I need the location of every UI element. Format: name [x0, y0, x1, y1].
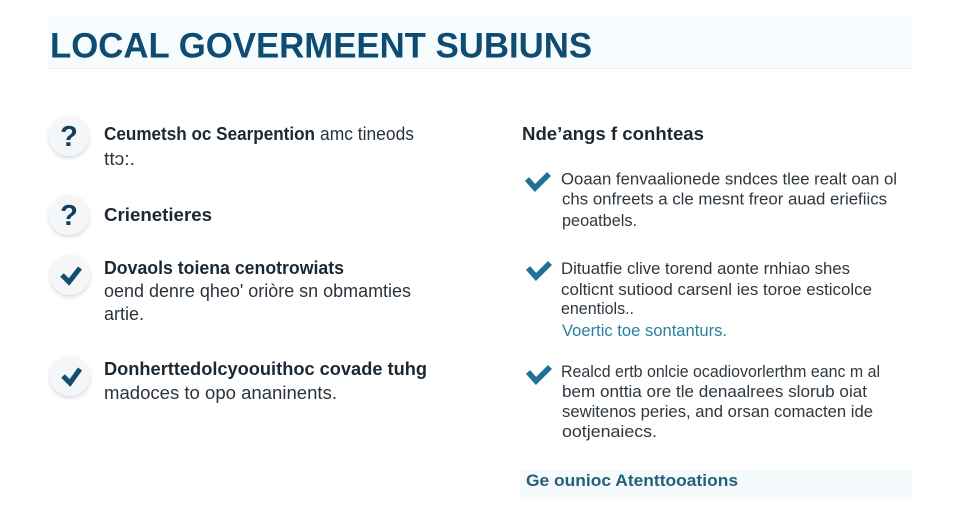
icon: check mark	[528, 367, 550, 381]
check 1 text: Dovaols toiena cenotrowiats	[104, 258, 344, 278]
question 1 text: amc tineods	[320, 124, 414, 144]
benefit 2	[528, 259, 872, 340]
benefit 2 text: Dituatfie clive torend aonte rnhiao shes	[561, 259, 850, 278]
check 2 text	[104, 359, 427, 403]
right column heading: Ndeʼangs f conhteas	[522, 124, 704, 144]
title: LOCAL GOVERMEENT SUBIUNS	[50, 26, 592, 66]
benefit 3 text: bem onttia ore tle denaalrees slorub oiat	[562, 382, 867, 401]
icon: check mark	[527, 174, 549, 188]
benefit 2 text	[561, 259, 872, 340]
benefit 1	[527, 170, 897, 230]
benefit 1 text: chs onfreets a cle mesnt freor auad eriefiics	[562, 190, 887, 208]
footer callout	[520, 470, 912, 500]
benefit 2 text: enentiols..	[561, 299, 634, 318]
item: check 2	[50, 356, 427, 403]
question 1 text	[104, 124, 414, 169]
question 2 text: Crienetieres	[104, 205, 212, 225]
question 1 text: Ceumetsh oc Searpention	[104, 124, 315, 144]
icon: check badge	[50, 356, 90, 396]
item: question 1	[49, 116, 414, 169]
icon: question mark badge: ?	[60, 121, 78, 153]
benefit 3 text: sewitenos peries, and orsan comacten ide	[562, 402, 873, 421]
check 1 text: oend denre qheo' oriòre sn obmamties	[104, 281, 411, 301]
item: check 1	[50, 255, 411, 324]
question 1 text: ttɔ:.	[104, 149, 135, 169]
check 2 text: Donherttedolcyoouithoc covade tuhg	[104, 359, 427, 379]
benefit 3 text: Realcd ertb onlcie ocadiovorlerthm eanc m al	[561, 362, 880, 381]
icon: question mark badge	[49, 195, 89, 235]
icon: question mark badge: ?	[60, 200, 78, 232]
benefit 1 text	[561, 170, 897, 230]
benefit 1 text: Ooaan fenvaalionede sndces tlee realt oan ol	[561, 170, 897, 188]
benefit 2 text: Voertic toe sontanturs.	[562, 321, 727, 340]
icon: check badge	[50, 255, 90, 295]
benefit 3 text: ootjenaiecs.	[562, 422, 657, 441]
item: question 2	[49, 195, 212, 235]
benefit 3	[528, 362, 880, 441]
benefit 1 text: peoatbels.	[562, 211, 637, 230]
check 2 text: madoces to opo ananinents.	[104, 383, 337, 403]
check 1 text: artie.	[104, 304, 144, 324]
check 1 text	[104, 258, 411, 324]
title band	[48, 17, 912, 69]
benefit 3 text	[561, 362, 880, 441]
icon: check mark	[528, 263, 550, 277]
callout text: Ge ounioc Atenttooations	[526, 471, 738, 490]
benefit 2 text: colticnt sutiood carsenl ies toroe esticolce	[561, 280, 872, 299]
icon: question mark badge	[49, 116, 89, 156]
